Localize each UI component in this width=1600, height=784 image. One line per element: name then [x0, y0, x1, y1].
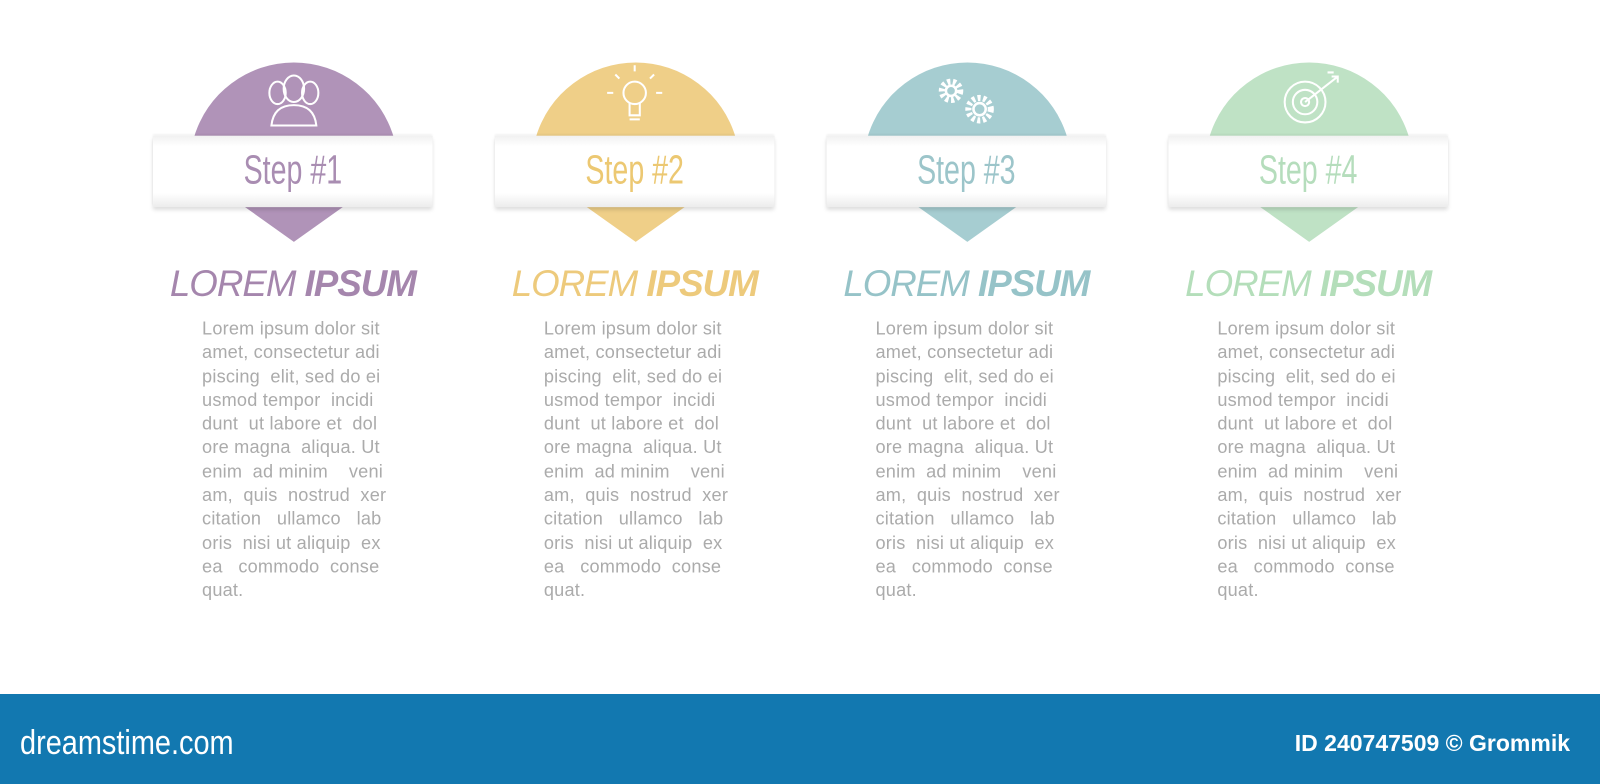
step 1 column — [152, 62, 434, 600]
label: Step #1: Step #1 — [244, 148, 342, 193]
heading 2: LOREM IPSUM — [512, 262, 758, 304]
ribbon 4 — [1168, 136, 1448, 207]
label: Step #3: Step #3 — [917, 148, 1016, 193]
footer logo text: dreamstime.com — [20, 724, 234, 762]
ribbon 1 — [153, 136, 433, 207]
body text 2: Lorem ipsum dolor sit amet, consectetur adi piscing elit, sed do ei usmod tempor incidi dunt ut labore et dol ore magna aliqua. Ut enim ad minim veni am, quis nostrud xer citation ullamco lab oris nisi ut aliquip ex ea commodo conse quat. — [544, 318, 728, 600]
badge shape 2 — [536, 62, 735, 242]
step 3 column — [825, 62, 1107, 600]
ribbon 3 — [827, 136, 1106, 207]
heading 3: LOREM IPSUM — [843, 262, 1089, 304]
ribbon 2 — [495, 136, 774, 207]
label: Step #4: Step #4 — [1259, 148, 1357, 193]
body text 4: Lorem ipsum dolor sit amet, consectetur adi piscing elit, sed do ei usmod tempor incidi dunt ut labore et dol ore magna aliqua. Ut enim ad minim veni am, quis nostrud xer citation ullamco lab oris nisi ut aliquip ex ea commodo conse quat. — [1217, 318, 1402, 600]
heading 4: LOREM IPSUM — [1185, 262, 1431, 304]
body text 3: Lorem ipsum dolor sit amet, consectetur adi piscing elit, sed do ei usmod tempor incidi dunt ut labore et dol ore magna aliqua. Ut enim ad minim veni am, quis nostrud xer citation ullamco lab oris nisi ut aliquip ex ea commodo conse quat. — [876, 318, 1060, 600]
step 4 column — [1167, 62, 1449, 600]
badge shape 4 — [1210, 62, 1408, 242]
footer id text: ID 240747509 © Grommik — [1295, 730, 1570, 756]
body text 1: Lorem ipsum dolor sit amet, consectetur adi piscing elit, sed do ei usmod tempor incidi dunt ut labore et dol ore magna aliqua. Ut enim ad minim veni am, quis nostrud xer citation ullamco lab oris nisi ut aliquip ex ea commodo conse quat. — [202, 318, 386, 600]
footer bar — [0, 694, 1600, 784]
badge shape 3 — [868, 62, 1067, 242]
badge shape 1 — [194, 62, 394, 242]
label: Step #2: Step #2 — [585, 148, 684, 193]
heading 1: LOREM IPSUM — [170, 262, 416, 304]
step 2 column — [494, 62, 776, 600]
